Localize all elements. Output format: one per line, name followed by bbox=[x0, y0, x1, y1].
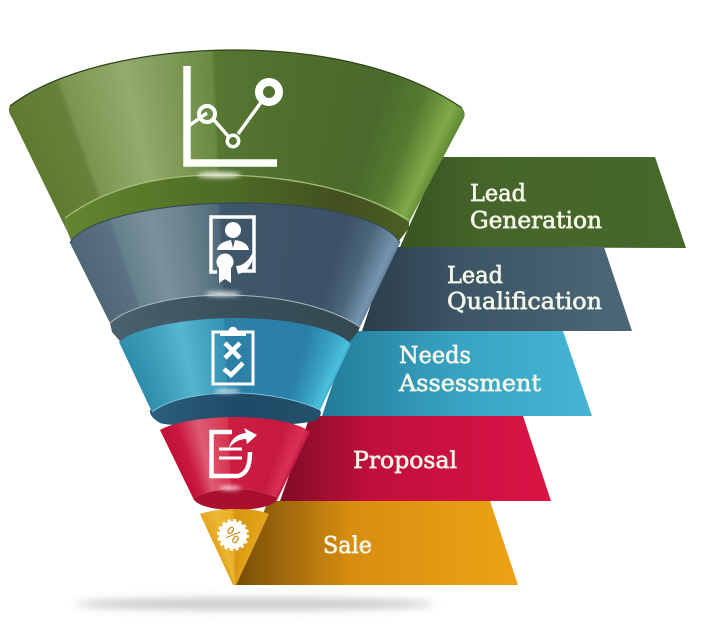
icon: certified profile document bbox=[211, 217, 254, 283]
band: Sale bbox=[235, 501, 518, 585]
funnel tier 3: teal bbox=[119, 318, 351, 425]
band: Needs Assessment bbox=[322, 331, 592, 416]
icon: clipboard checklist bbox=[213, 327, 253, 384]
label: Lead Generation: Generation bbox=[470, 208, 602, 234]
funnel tier 5: gold cone bbox=[200, 509, 269, 585]
band: Lead Qualification bbox=[362, 247, 632, 331]
label: Needs Assessment: Needs bbox=[399, 343, 471, 369]
label: Lead Qualification: Qualification bbox=[447, 289, 602, 315]
funnel tier 1: green bbox=[8, 49, 465, 240]
label: Sale: Sale bbox=[323, 533, 372, 559]
icon: line chart bbox=[187, 66, 279, 163]
label: Needs Assessment: Assessment bbox=[398, 371, 542, 397]
funnel tier 2: slate bbox=[70, 202, 400, 342]
band: Lead Generation bbox=[400, 157, 686, 248]
ground shadow bbox=[75, 598, 435, 610]
label: Lead Qualification: Lead bbox=[447, 263, 503, 289]
funnel tier 4: red bbox=[160, 417, 310, 510]
icon: percent badge: % bbox=[221, 522, 245, 548]
label: Lead Generation: Lead bbox=[470, 181, 526, 207]
band: Proposal bbox=[280, 416, 551, 501]
label: Proposal: Proposal bbox=[353, 448, 457, 474]
icon: proposal document with arrow bbox=[212, 428, 257, 476]
